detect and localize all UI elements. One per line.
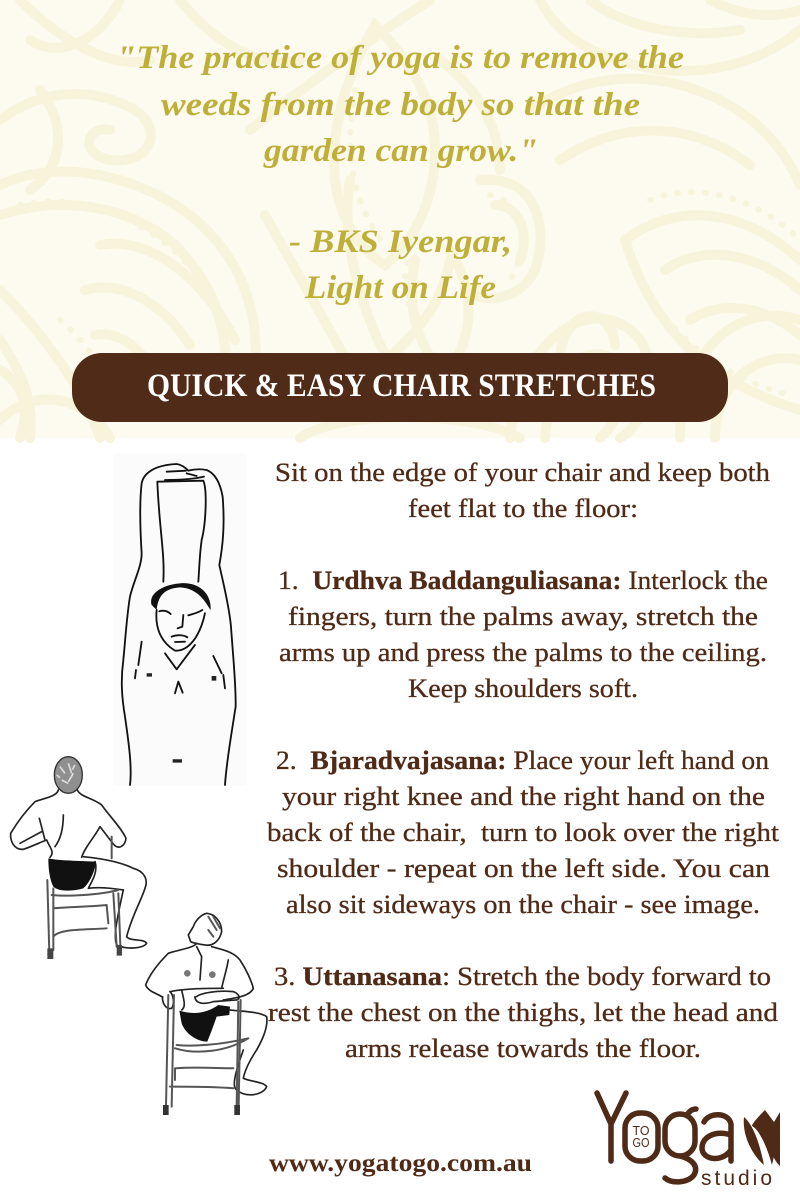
quote: weeds from the body so that the xyxy=(161,87,640,123)
step 1 text: arms up and press the palms to the ceiling. xyxy=(279,638,767,667)
panel: cream paisley header background xyxy=(0,0,800,438)
step 1 text xyxy=(278,566,768,703)
step 2 text xyxy=(267,746,780,919)
banner heading: QUICK & EASY CHAIR STRETCHES xyxy=(147,368,656,404)
step 1 text: 1. Urdhva Baddanguliasana: Interlock the xyxy=(278,566,768,595)
step 2 text: shoulder - repeat on the left side. You can xyxy=(277,854,770,883)
intro text xyxy=(275,458,770,523)
step 1 text: Keep shoulders soft. xyxy=(408,674,638,703)
step 3 text: 3. Uttanasana : Stretch the body forward to xyxy=(274,962,771,991)
step 3 text: arms release towards the floor. xyxy=(345,1034,701,1063)
intro text: Sit on the edge of your chair and keep both xyxy=(275,458,770,487)
website url: www.yogatogo.com.au xyxy=(269,1150,532,1177)
intro text: feet flat to the floor: xyxy=(408,494,638,523)
step 2 text: your right knee and the right hand on the xyxy=(282,782,765,811)
quote xyxy=(116,40,684,306)
illustration: seated side twist facing front xyxy=(146,913,267,1115)
step 3 text xyxy=(268,962,778,1063)
instructions text xyxy=(267,458,780,1063)
step 3 text: rest the chest on the thighs, let the head and xyxy=(268,998,778,1027)
logo: Yoga To Go Studio: TO xyxy=(632,1123,650,1138)
logo: Yoga To Go Studio xyxy=(597,1093,780,1190)
banner heading xyxy=(72,353,728,422)
illustration: overhead arm stretch xyxy=(113,453,247,786)
logo: Yoga To Go Studio: GO xyxy=(632,1135,650,1150)
step 2 text: also sit sideways on the chair - see image. xyxy=(286,890,760,919)
step 2 text: back of the chair, turn to look over the right xyxy=(267,818,780,847)
quote: "The practice of yoga is to remove the xyxy=(116,40,684,76)
logo: Yoga To Go Studio: studio xyxy=(701,1167,772,1190)
quote: Light on Life xyxy=(304,270,496,306)
step 1 text: fingers, turn the palms away, stretch the xyxy=(288,602,758,631)
quote: garden can grow." xyxy=(263,133,538,169)
quote: - BKS Iyengar, xyxy=(289,224,512,260)
step 2 text: 2. Bjaradvajasana: Place your left hand on xyxy=(276,746,769,775)
illustration: seated twist from behind xyxy=(11,757,147,959)
